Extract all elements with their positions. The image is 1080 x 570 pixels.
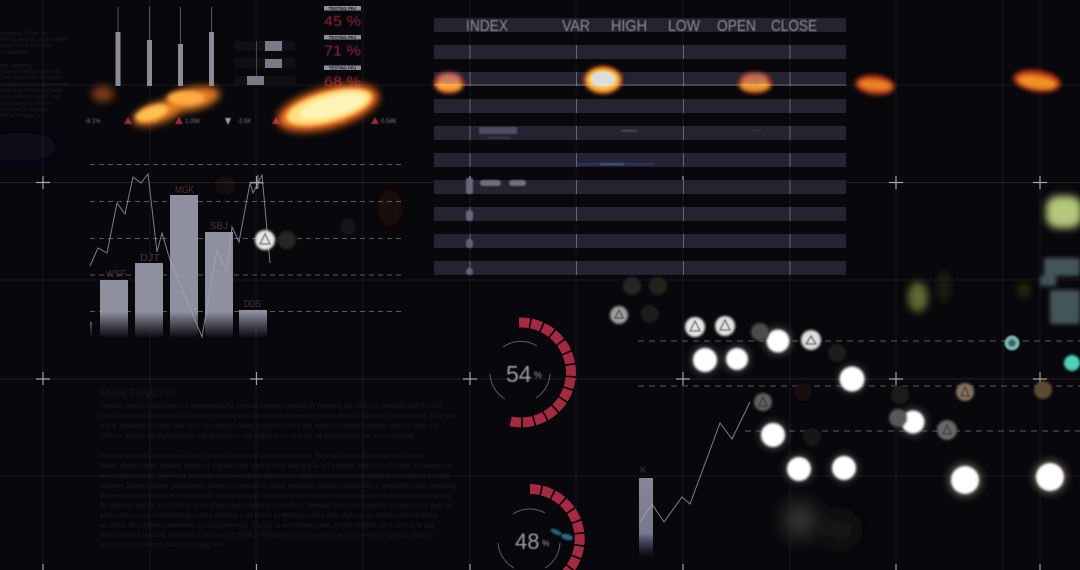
financial analysis text block: Since insurance also enjoys some tax benefits, utilizing insurance investment products may be a critical piece of the overall investment planning. bbox=[100, 491, 452, 500]
orange light flares bbox=[92, 66, 1062, 141]
testing percentages bbox=[324, 6, 361, 90]
table header labels: INDEX bbox=[466, 18, 509, 35]
indicator row labels: -2.5K bbox=[237, 119, 251, 125]
testing percentages: 68 % bbox=[324, 74, 361, 90]
gauge: 48 percent: % bbox=[542, 538, 550, 548]
gauge: 54 percent: % bbox=[534, 370, 542, 380]
financial analysis text block: which it can later save you money in the long term. bbox=[99, 540, 224, 549]
k trend line bbox=[640, 402, 750, 522]
recycle-shaped bokeh lights bbox=[255, 219, 1052, 446]
clipped text at left edge bbox=[0, 31, 70, 119]
financial analysis text block: worth is a person's balance sheet, calculated by adding up all assets under that person's control, minus all liabilities of the household, at one point bbox=[99, 411, 458, 420]
financial analysis text block: Adequate protection: the analysis of how to protect a household from unforeseen risks. These risks can be divided into the following: bbox=[100, 451, 424, 460]
ambient colour glows bbox=[0, 133, 402, 226]
financial analysis text block: FINANCE ANALYSIS bbox=[100, 388, 176, 400]
gauge: 54 percent bbox=[490, 322, 571, 422]
indicator row labels: -4.0K bbox=[332, 119, 346, 125]
clipped text at left edge: equately protect themselves bbox=[0, 82, 70, 88]
table row bands bbox=[434, 18, 846, 275]
indicator row labels: 5.6K bbox=[282, 119, 294, 125]
chart bar labels: DJT bbox=[140, 253, 160, 264]
indicator row labels: 1.05K bbox=[185, 119, 201, 125]
k label: K bbox=[640, 465, 647, 476]
smoky lower glows bbox=[786, 502, 854, 546]
horizontal bar indicators bbox=[234, 41, 295, 85]
financial analysis text block: insurance. Business owners, professionals, athletes and entertainers require specialized insurance professionals to adequately protect themselves. bbox=[100, 481, 458, 490]
clipped text at left edge: the household, at one point bbox=[0, 37, 68, 43]
candlestick chart bbox=[116, 7, 214, 86]
clipped text at left edge: the following: bbox=[0, 63, 33, 69]
clipped text at left edge: of tax must be paid bbox=[0, 107, 47, 113]
table header labels: OPEN bbox=[717, 18, 756, 35]
clipped text at left edge: to reduce the lifetime bbox=[0, 101, 52, 107]
financial analysis text block bbox=[99, 388, 458, 549]
indicator row labels: 0.54K bbox=[381, 119, 397, 125]
table header labels: HIGH bbox=[611, 18, 647, 35]
testing percentages: 45 % bbox=[324, 13, 361, 30]
table header labels: CLOSE bbox=[771, 18, 817, 35]
clipped text at left edge: schedule if they fell bbox=[0, 31, 48, 37]
clipped text at left edge: erall investment planning bbox=[0, 88, 62, 94]
testing percentages: 71 % bbox=[324, 42, 361, 60]
clipped text at left edge: if you will pay taxes, but bbox=[0, 94, 60, 100]
k bar and line chart bbox=[638, 341, 1080, 557]
table row flares bbox=[434, 66, 1062, 97]
testing percentages: TESTING PRJ bbox=[329, 35, 357, 40]
data table: index, var, high, low, open, close bbox=[434, 18, 846, 275]
clipped text at left edge: l require the purchase of bbox=[0, 69, 61, 75]
chart dashed gridlines bbox=[90, 164, 402, 312]
indicator row labels bbox=[85, 117, 397, 125]
table header labels: VAR bbox=[562, 18, 590, 35]
financial analysis text block: when and how much. Government gives many incentives in the form of tax deductions and credits, which can be used to reduce the lifetime bbox=[99, 510, 438, 520]
chart bar labels: SBJ bbox=[210, 221, 228, 232]
gauge: 48 percent bbox=[498, 489, 580, 570]
clipped text at left edge: complished bbox=[0, 50, 28, 56]
financial analysis text block: Understanding how to take advantage of the myriad tax breaks when planning one's personal finances can make a significant impact in bbox=[100, 530, 434, 539]
chart trend line bbox=[90, 174, 270, 337]
chart bar labels: MGK bbox=[175, 185, 194, 196]
table header labels bbox=[466, 18, 817, 35]
chart bars bbox=[90, 195, 267, 337]
gauge: 54 percent: 54 bbox=[506, 361, 532, 387]
financial analysis text block: Tax planning: typically, the income tax is the single largest expense in a household. Managing taxes is not a question of if you will pay taxes, but bbox=[100, 500, 454, 510]
chart bar labels: WSF bbox=[106, 269, 126, 280]
testing percentages: TESTING PRJ bbox=[329, 66, 357, 70]
bright bokeh lights bbox=[691, 327, 1067, 497]
financial analysis text block: an insurance contract. Determining how much insurance to get, at the most cost effective terms requires knowledge of the market for personal bbox=[100, 471, 450, 480]
clipped text at left edge: within the same year bbox=[0, 43, 51, 49]
financial analysis text block: From this analysis, the financial planner can determine to what degree and in what time the personal goals can be accomplished. bbox=[100, 431, 415, 440]
table header labels: LOW bbox=[668, 18, 700, 35]
indicator row labels: -8.1% bbox=[85, 119, 101, 125]
clipped text at left edge: f the market for personal bbox=[0, 75, 61, 81]
financial analysis text block: Financial position is concerned with understanding the personal resources available by examining net worth and household cash flow. Net bbox=[100, 401, 442, 410]
indicator row labels: 2.5K bbox=[146, 119, 158, 125]
gauge: 48 percent: 48 bbox=[515, 529, 539, 554]
teal reflection bbox=[550, 527, 574, 541]
testing percentages: TESTING PRJ bbox=[329, 6, 357, 11]
right dashed gridlines bbox=[638, 341, 1080, 431]
financial analysis text block: liability, property, death, disability, health and long term care. Some of these risks may be self-insurable, while most will require the purchase of bbox=[100, 461, 453, 470]
financial analysis text block: in time. Household cash flow totals up all the expected sources of income within a year, minus all expected expenses within the same year. bbox=[100, 421, 440, 430]
financial analysis text block: tax burden. Most modern governments use a progressive tax. Typically, as one's income grows, a higher marginal rate of tax must be paid. bbox=[100, 520, 436, 530]
chart bar labels bbox=[106, 185, 261, 310]
bar and line chart bbox=[90, 164, 402, 337]
table column lines bbox=[470, 45, 790, 275]
clipped text at left edge: nificant impact in bbox=[0, 113, 42, 119]
green and teal out-of-focus lights bbox=[908, 196, 1080, 371]
table cell marks bbox=[466, 127, 762, 275]
chart bar labels: DDS bbox=[244, 299, 261, 310]
